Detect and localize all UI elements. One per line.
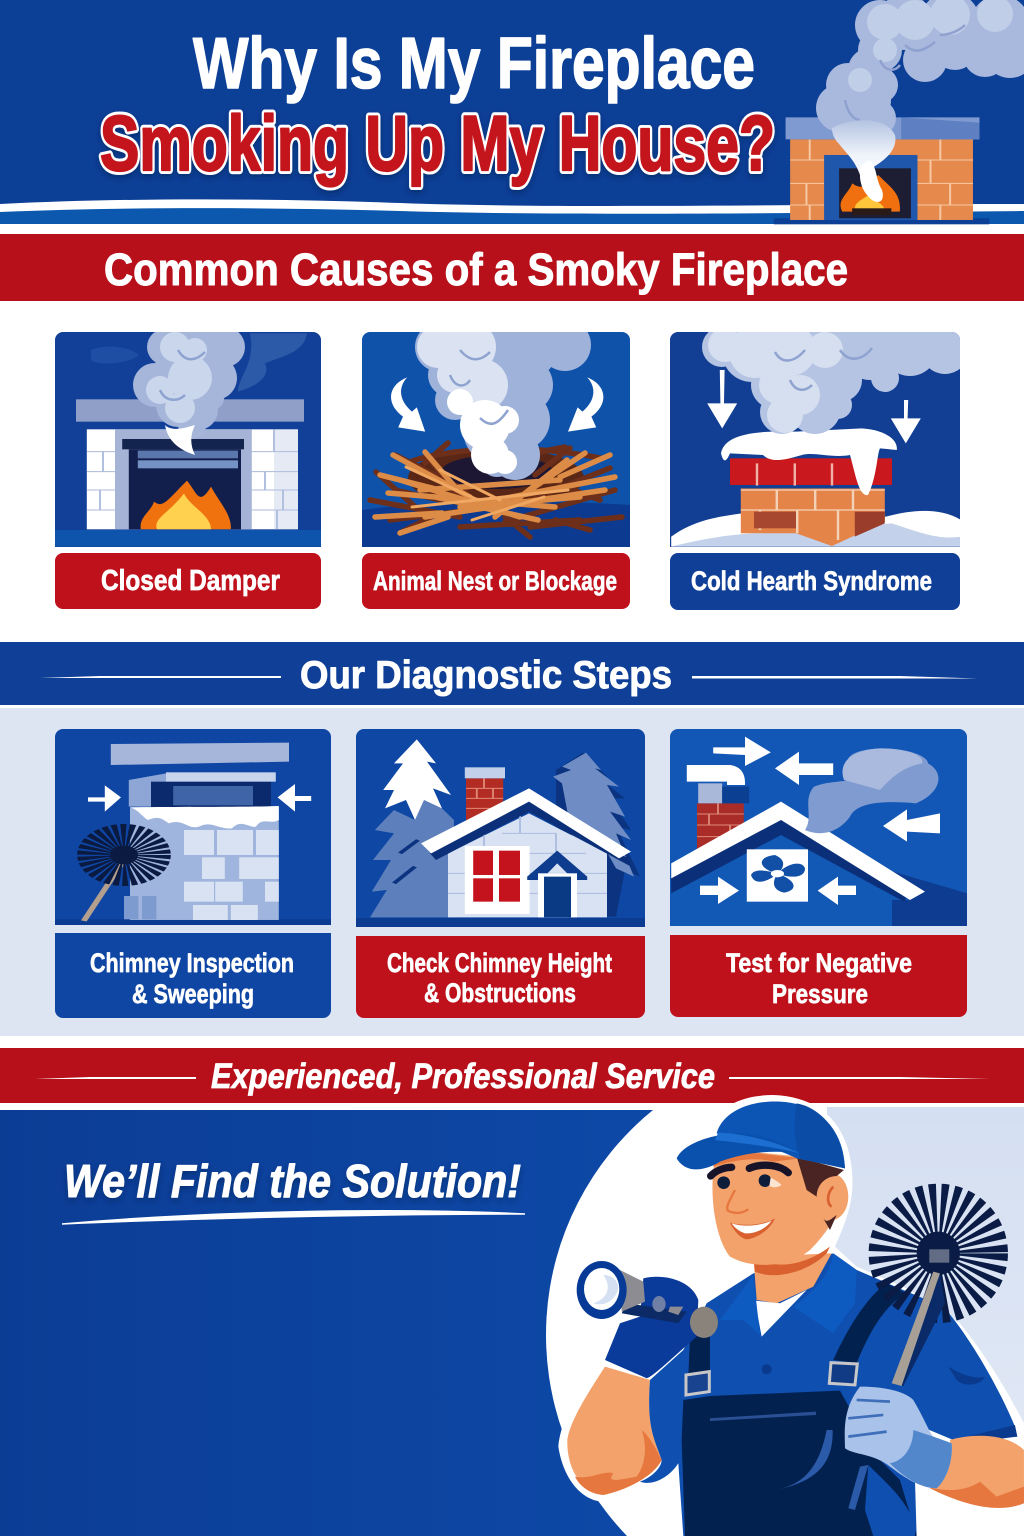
section banner: professional service — [0, 1048, 1024, 1103]
white spotlight circle — [546, 1110, 1024, 1536]
label: chimney inspection — [55, 933, 331, 1018]
card: chimney height — [356, 729, 645, 1018]
illustration: house and trees — [356, 729, 645, 927]
title line 2: Smoking Up My House? — [100, 99, 775, 187]
label: animal nest — [362, 553, 630, 609]
light right panel — [827, 1107, 1024, 1536]
sweep brush — [903, 1218, 974, 1289]
card: chimney inspection — [55, 729, 331, 1018]
shirt — [640, 1253, 1017, 1536]
illustration: chimney sweep technician — [558, 1095, 1024, 1536]
label: chimney height — [356, 936, 645, 1018]
flashlight hand — [605, 1277, 698, 1378]
label: closed damper — [55, 553, 321, 609]
illustration: chimney and brush — [55, 729, 331, 929]
callout: we'll find the solution: We’ll Find the Solution! — [64, 1155, 521, 1207]
section banner: diagnostic steps — [0, 642, 1024, 705]
title line 1: Why Is My Fireplace — [193, 24, 755, 104]
heading: common causes: Common Causes of a Smoky Fireplace — [104, 244, 848, 295]
heading: professional service: Experienced, Professional Service — [211, 1057, 715, 1096]
label: cold hearth: Cold Hearth Syndrome — [691, 566, 932, 596]
panel: diagnostic steps background — [0, 708, 1024, 1036]
label: chimney inspection: Chimney Inspection — [90, 948, 294, 978]
header banner — [0, 0, 1024, 234]
illustration: smoking fireplace — [774, 0, 1024, 224]
overalls — [682, 1391, 917, 1536]
collar — [720, 1275, 760, 1335]
card: cold hearth — [670, 318, 969, 610]
label: cold hearth — [670, 553, 960, 610]
illustration: cold hearth syndrome — [670, 318, 969, 547]
hair — [797, 1157, 844, 1230]
label: negative pressure — [670, 935, 967, 1017]
eyebrows — [711, 1165, 788, 1176]
title line 2: Smoking Up My House? — [100, 99, 775, 187]
right glove — [845, 1387, 952, 1488]
nest — [370, 443, 622, 537]
heading: diagnostic steps: Our Diagnostic Steps — [300, 654, 672, 697]
callout: we'll find the solution — [62, 1155, 525, 1224]
label: animal nest: Animal Nest or Blockage — [373, 566, 617, 596]
panel: call to action — [0, 1107, 1024, 1536]
card: negative pressure — [670, 729, 967, 1017]
straps and buckles — [688, 1330, 710, 1377]
label: chimney height: & Obstructions — [424, 978, 576, 1008]
head — [712, 1148, 840, 1265]
label: negative pressure: Test for Negative — [726, 948, 912, 978]
section banner: common causes — [0, 234, 1024, 301]
eyes — [717, 1176, 730, 1189]
left arm — [567, 1367, 662, 1495]
illustration: animal nest — [362, 314, 630, 547]
label: negative pressure: Pressure — [772, 979, 868, 1009]
right forearm — [930, 1436, 1024, 1508]
cap — [717, 1101, 845, 1168]
card: closed damper — [55, 322, 322, 609]
card: animal nest — [362, 314, 630, 609]
smoke — [415, 332, 591, 480]
label: chimney inspection: & Sweeping — [132, 979, 254, 1009]
smoke — [133, 322, 245, 455]
label: closed damper: Closed Damper — [101, 565, 280, 597]
smoke — [702, 332, 960, 434]
flashlight — [620, 1270, 645, 1312]
illustration: closed damper — [55, 322, 322, 547]
neck — [753, 1253, 832, 1303]
illustration: house with fan — [670, 729, 967, 928]
silhouette outline — [558, 1095, 1024, 1536]
nose and mouth — [727, 1190, 748, 1213]
label: chimney height: Check Chimney Height — [387, 948, 612, 978]
